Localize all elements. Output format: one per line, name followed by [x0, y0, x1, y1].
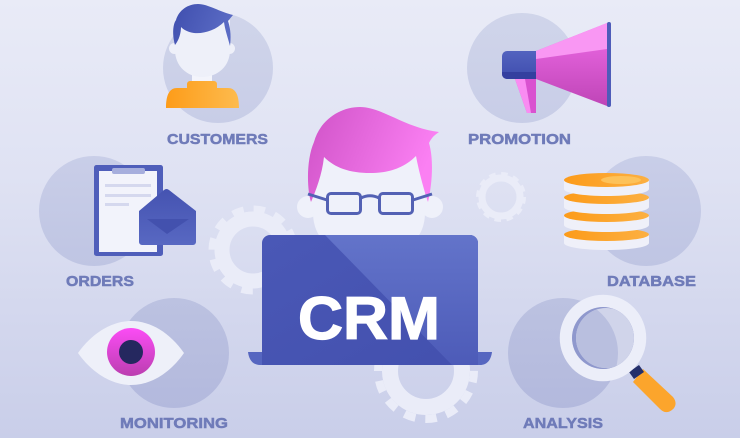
central figure: [248, 107, 492, 365]
gear: left: [212, 209, 294, 291]
label: promotion: PROMOTION: [468, 131, 571, 148]
panel: database: [564, 156, 701, 290]
circle: customers backdrop: [163, 13, 273, 123]
panel: orders: [39, 156, 196, 290]
laptop: [248, 235, 492, 365]
icon: megaphone: [502, 22, 611, 113]
icon: customer person: [166, 4, 239, 108]
circle: orders backdrop: [39, 156, 149, 266]
icon: magnifying glass: [560, 294, 676, 412]
icon: pink hair: [308, 107, 439, 202]
panel: customers: [163, 4, 273, 148]
label: orders: ORDERS: [66, 273, 134, 290]
laptop title: CRM: CRM: [298, 285, 440, 352]
panel: promotion: [467, 13, 611, 148]
label: monitoring: MONITORING: [120, 415, 228, 432]
label: database: DATABASE: [607, 273, 696, 290]
circle: database backdrop: [591, 156, 701, 266]
circle: monitoring backdrop: [119, 298, 229, 408]
gear: bottom: [378, 323, 474, 419]
laptop base lip: [248, 352, 492, 365]
panel: monitoring: [78, 298, 229, 432]
icon: stacked discs: [564, 173, 649, 250]
icon: head: [297, 145, 443, 237]
label: analysis: ANALYSIS: [523, 415, 603, 432]
circle: analysis backdrop: [508, 298, 618, 408]
label: customers: CUSTOMERS: [167, 131, 268, 148]
laptop screen: [262, 235, 478, 365]
icon: eye: [78, 321, 184, 385]
icon: glasses: [308, 194, 432, 214]
icon: clipboard and envelope: [94, 165, 196, 256]
circle: promotion backdrop: [467, 13, 577, 123]
panel: analysis: [508, 298, 676, 432]
gear: small right: [478, 174, 524, 220]
